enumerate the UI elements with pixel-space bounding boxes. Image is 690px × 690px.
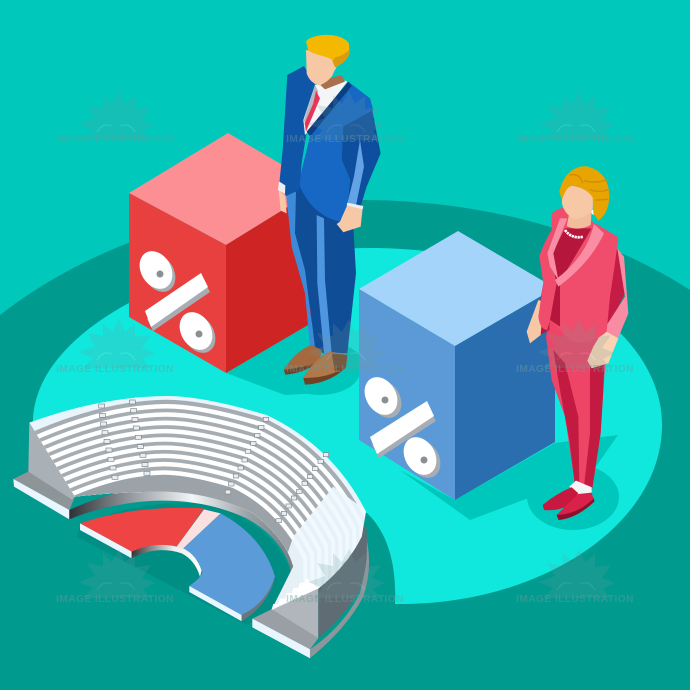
dark ground ellipse [0,200,690,690]
centre wedge [177,509,221,548]
inner metal curve [132,545,202,577]
watermark 5 [286,319,404,375]
watermark 1: IMAGE ILLUSTRATION [56,134,174,145]
jacket [538,208,618,342]
right arm [340,83,381,208]
watermark 6: IMAGE ILLUSTRATION [516,364,634,375]
aisle steps [99,400,329,523]
shirt [303,80,347,135]
left arm [279,66,315,196]
light cyan platform [30,248,662,604]
jacket body [298,82,373,222]
inner metal band [69,487,293,610]
hands [279,190,363,232]
watermark 1 [56,91,174,145]
watermark 3: IMAGE ILLUSTRATION [516,134,634,145]
watermark 8: IMAGE ILLUSTRATION [286,594,404,605]
step zigzag [272,578,318,609]
neck [317,75,345,89]
woman in red suit [527,166,628,520]
watermark 3 [516,91,634,145]
percent sign on blue cube [358,371,447,484]
shoes [284,345,347,385]
watermark 6 [516,319,634,375]
right end base [252,537,369,658]
lapels [547,218,604,287]
watermark 9: IMAGE ILLUSTRATION [516,594,634,605]
trousers [546,320,607,488]
pearl necklace [565,230,583,237]
neck [567,210,592,229]
blue seat block [183,513,275,621]
tie [305,91,320,132]
percent sign on red cube [133,245,222,359]
watermark 8 [286,549,404,605]
watermark 7: IMAGE ILLUSTRATION [56,594,174,605]
floor shadow [77,503,297,625]
theatre floor shadow and semicircle parliament [13,396,370,658]
left end base [13,423,75,519]
lapel [307,82,352,137]
watermark 4: IMAGE ILLUSTRATION [56,364,174,375]
socks [569,481,592,495]
red seat block [80,508,204,558]
earring [591,209,597,215]
hands [527,300,618,368]
tiered seating [30,396,366,610]
cube and figure shadows [226,323,619,530]
trousers [286,183,356,353]
blouse [550,228,592,327]
man in blue suit [278,35,381,385]
blue cube [358,231,555,500]
hair [306,35,349,67]
right end walls [272,523,367,638]
face [306,50,337,85]
face [562,186,593,219]
far arm [537,283,550,335]
red cube [129,133,320,373]
watermark 5: IMAGE ILLUSTRATION [286,364,404,375]
hair [559,166,609,221]
watermark 2: IMAGE ILLUSTRATION [286,134,404,145]
watermark 9 [516,549,634,605]
watermark 7 [56,549,174,605]
seating right end highlight [272,486,366,610]
watermark 2 [286,91,404,145]
shoes [543,487,594,520]
watermark 4 [56,319,174,375]
right arm [600,240,628,340]
cuffs [278,181,363,209]
